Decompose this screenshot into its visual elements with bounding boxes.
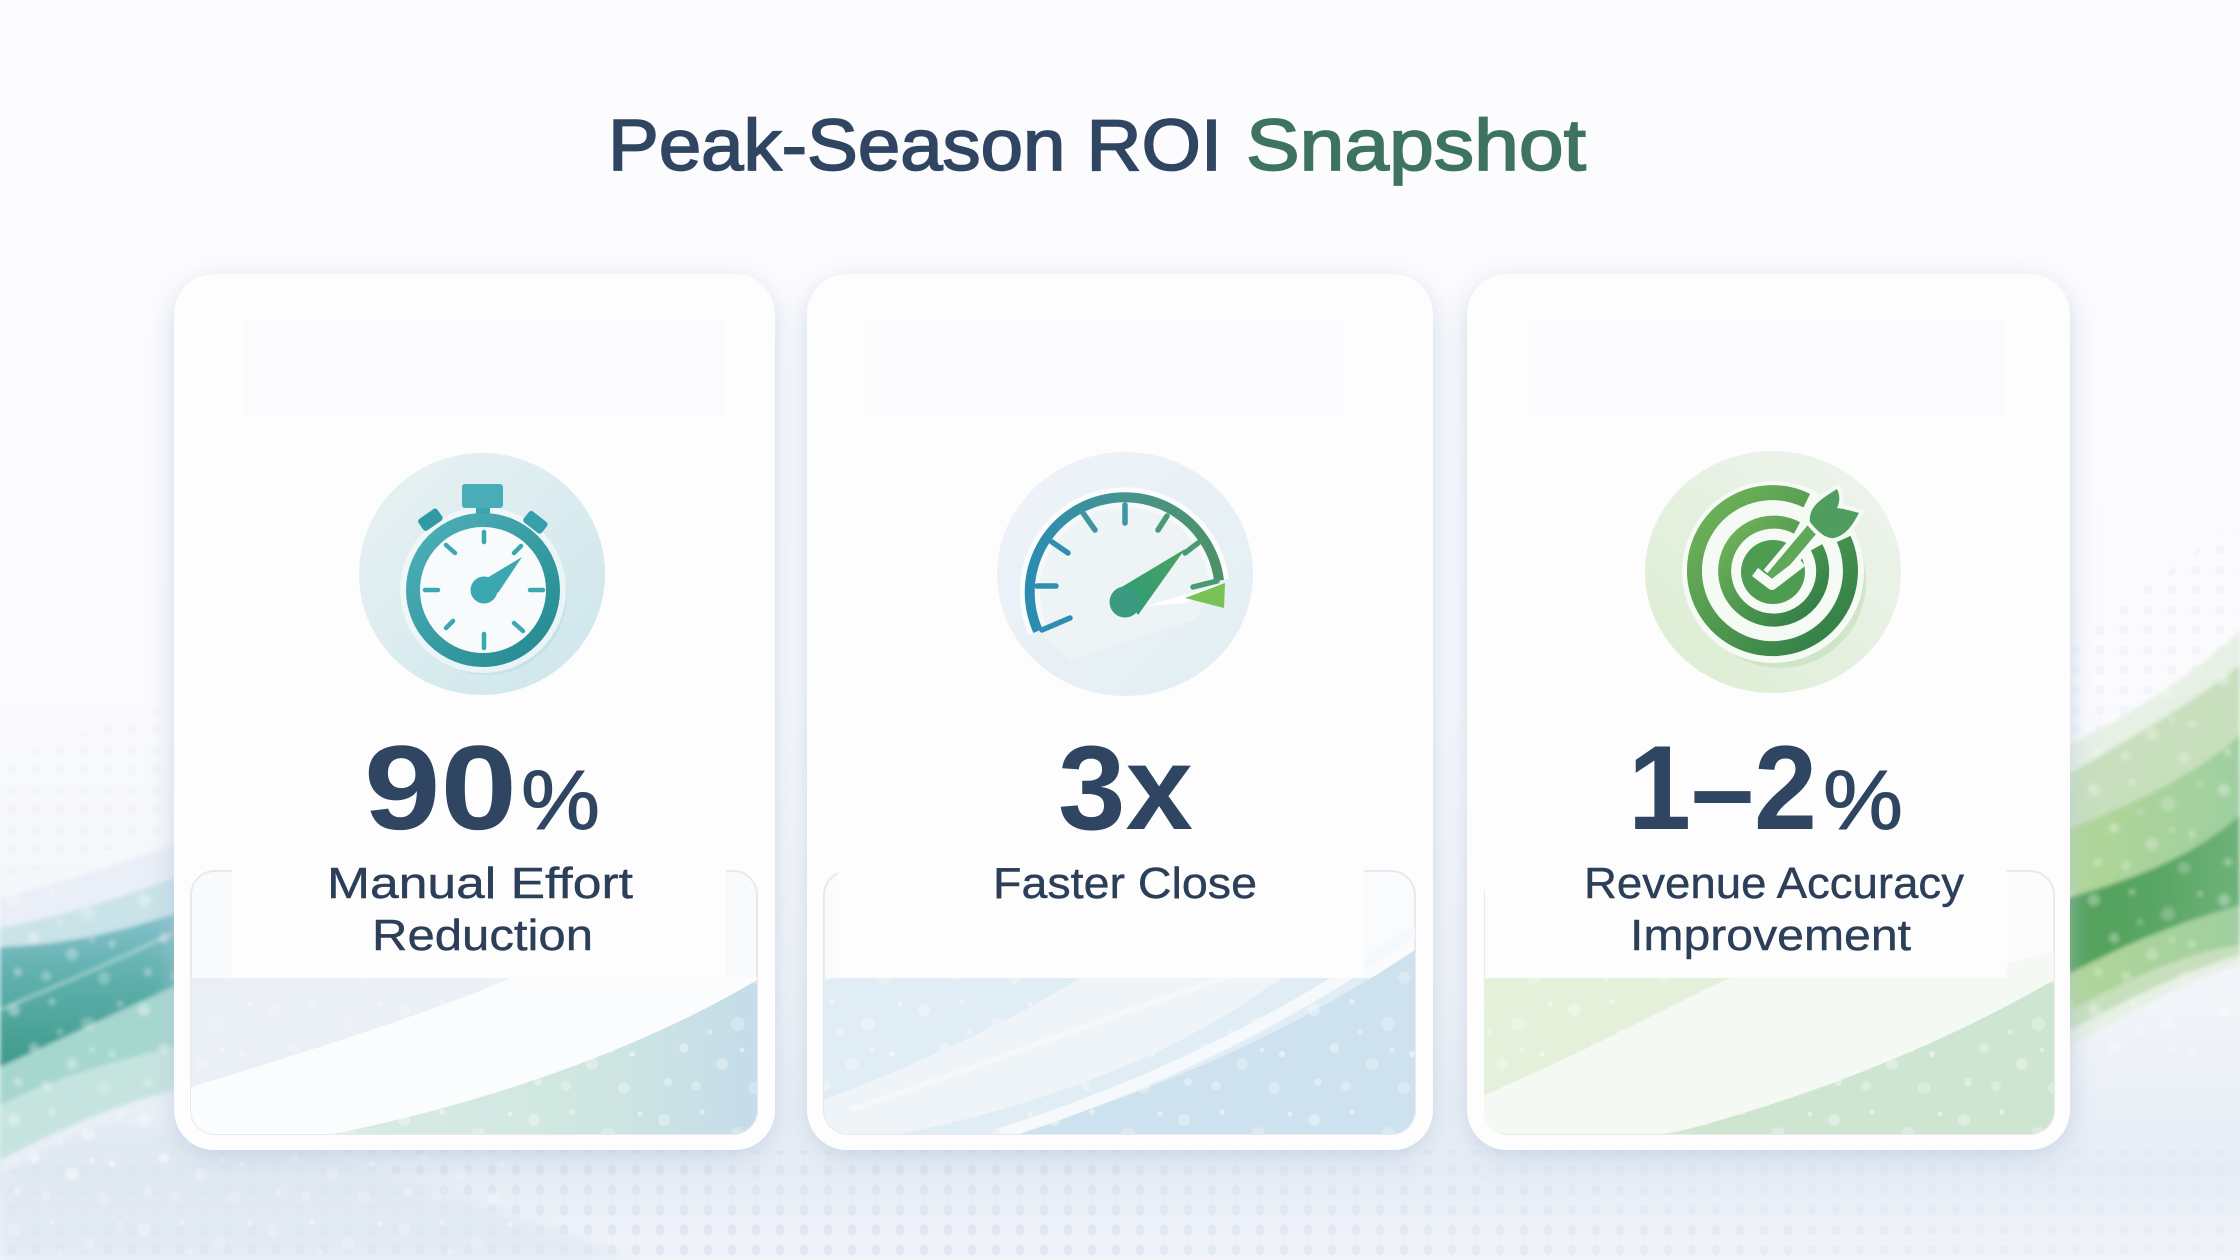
card art: wave panel xyxy=(824,860,1415,1134)
right waves xyxy=(2040,630,2240,1062)
label: manual effort reduction: Reduction xyxy=(372,911,593,960)
title: Peak-Season ROI xyxy=(608,106,1222,186)
label: manual effort reduction xyxy=(327,859,633,960)
label: faster close: Faster Close xyxy=(993,859,1257,908)
metric: 90% xyxy=(364,721,600,855)
panel: faster close card xyxy=(807,274,1433,1154)
icon: stopwatch xyxy=(359,453,605,695)
metric: 1–2%: % xyxy=(1823,753,1903,847)
metric: 90%: 90 xyxy=(364,721,517,855)
icon: target with arrow xyxy=(1645,451,1901,693)
label: revenue accuracy improvement: Improvement xyxy=(1630,911,1911,960)
panel: revenue accuracy improvement card xyxy=(1467,274,2070,1154)
card art: wave panel xyxy=(1484,860,2054,1134)
card art: wave panel xyxy=(191,860,757,1134)
metric: 3x: 3x xyxy=(1058,721,1193,855)
label: revenue accuracy improvement: Revenue Accuracy xyxy=(1584,859,1964,908)
label: revenue accuracy improvement xyxy=(1584,859,1964,960)
title xyxy=(608,106,1586,186)
left waves xyxy=(0,835,200,1190)
title: Snapshot xyxy=(1246,106,1586,186)
label: manual effort reduction: Manual Effort xyxy=(327,859,633,908)
background xyxy=(0,528,2240,1260)
metric: 1–2%: 1–2 xyxy=(1628,721,1817,855)
metric: 90%: % xyxy=(521,753,600,847)
panel: manual effort reduction card xyxy=(174,274,775,1154)
icon: speedometer gauge xyxy=(997,452,1253,696)
